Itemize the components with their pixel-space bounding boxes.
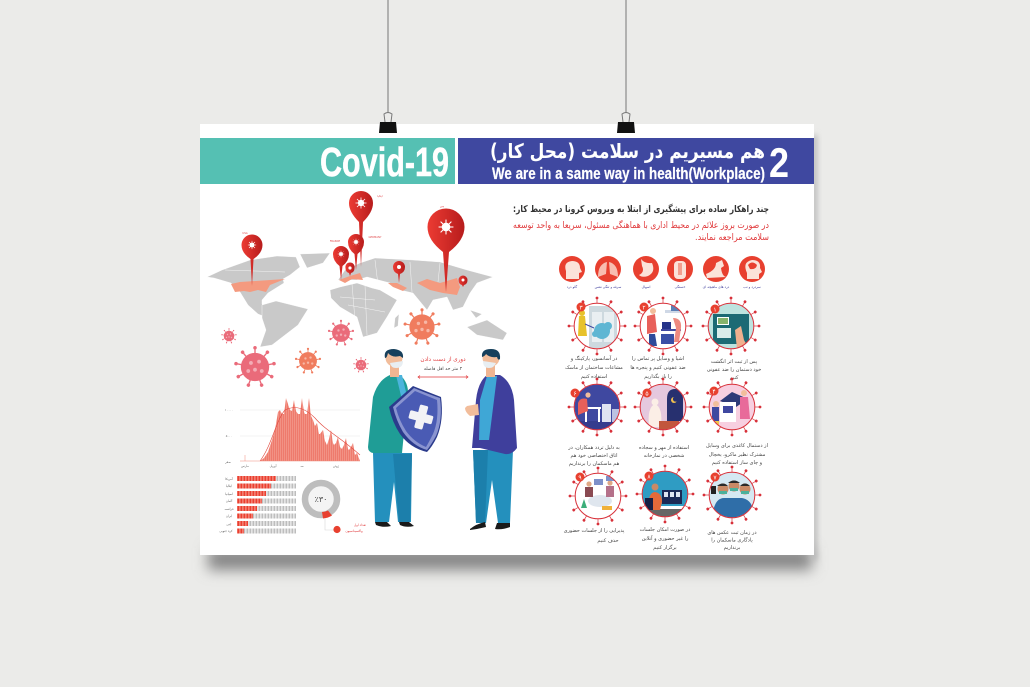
chart bars — [260, 398, 360, 461]
callout: social distance: دوری از دست دادن — [420, 357, 466, 363]
heading: Covid-19: Covid-19 — [320, 139, 449, 185]
badge 8: ۸ — [647, 474, 651, 480]
pin country labels: ایتالیا — [377, 195, 383, 198]
caption 4: از دستمال کاغذی برای وسایل — [706, 443, 768, 449]
header: title band — [458, 138, 814, 186]
step 2: workspace — [630, 297, 692, 380]
icon: headache and fever: سردرد و تب — [743, 285, 761, 289]
caption 8: در صورت امکان جلسات — [640, 527, 690, 533]
step 8: online meeting — [636, 465, 694, 551]
icon: fatigue — [667, 256, 693, 289]
caption 5: شخصی در نمازخانه — [644, 453, 684, 459]
caption 6: اتاق اختصاصی خود هم — [570, 453, 618, 459]
caption 9 — [564, 528, 625, 544]
chart axis labels: صفر — [224, 460, 231, 464]
highlighted: Iran — [388, 283, 407, 291]
pin: Switzerland — [345, 262, 355, 276]
step 3: elevator disinfection — [565, 297, 626, 380]
step 5: prayer — [634, 378, 692, 459]
icon: virus pink — [328, 320, 354, 346]
icon: muscle pain — [703, 256, 730, 289]
icon: headache and fever — [739, 256, 765, 289]
badge 5: ۵ — [645, 390, 649, 398]
caption 2 — [630, 356, 686, 380]
ranking bars: ایتالیا — [226, 484, 232, 488]
chart trend curve — [260, 408, 360, 461]
icon: virus orange — [295, 348, 321, 374]
ranking bars: فرانسه — [224, 507, 234, 511]
text: intro line: چند راهکار ساده برای پیشگیری از ابتلا به ویروس کرونا در محیط کار: — [513, 203, 769, 215]
pin: USA — [242, 234, 262, 286]
caption 6 — [567, 445, 620, 467]
badge 9: ۹ — [578, 474, 582, 482]
chart axis labels: آوریل — [270, 464, 277, 468]
chart axis labels: مارس — [241, 464, 249, 468]
hanging strings — [388, 0, 626, 113]
caption 9: پذیرایی را از جلسات حضوری — [564, 528, 625, 534]
caption 1: پس از ثبت اثر انگشت — [711, 358, 758, 365]
text: red notice: در صورت بروز علائم در محیط اداری با هماهنگی مسئول، سریعا به واحد توسعه — [513, 219, 769, 231]
poster shadow — [208, 135, 817, 570]
icon: virus orange large — [403, 308, 441, 345]
pin: China — [428, 208, 464, 292]
caption 1 — [707, 358, 761, 381]
area chart: daily cases — [224, 398, 360, 468]
highlighted: China — [417, 278, 460, 295]
icon: sore throat: گلو درد — [567, 284, 577, 289]
chart axis labels: ۵۰۰۰ — [226, 434, 232, 438]
heading: English title: We are in a same way in health(Workplace) — [492, 165, 765, 183]
caption 8: برگزار کنیم — [653, 544, 677, 551]
icon: muscle pain: درد های ماهیچه ای — [703, 285, 730, 289]
text: red notice — [513, 219, 769, 243]
caption 5: استفاده از مهر و سجاده — [639, 445, 689, 451]
callout: social distance — [418, 357, 468, 378]
world map — [207, 253, 507, 347]
ranking bars: اسپانیا — [225, 492, 233, 496]
pin country labels: GERMANY — [368, 235, 382, 239]
caption 3 — [565, 355, 623, 380]
caption 3: مشاعات ساختمان از ماسک — [565, 365, 623, 371]
pin country labels: USA — [242, 231, 248, 235]
character: man with shield — [368, 349, 442, 527]
binder clip left — [379, 112, 397, 133]
ranking bars: آمریکا — [225, 477, 233, 481]
badge 7: ۷ — [713, 474, 717, 482]
callout: social distance: ۲ متر حد اقل فاصله — [424, 366, 463, 372]
ranking bars: کره جنوبی — [219, 529, 233, 533]
icon: sore throat — [559, 256, 585, 289]
caption 6: به دلیل تردد همکاران، در — [567, 445, 620, 451]
caption 6: هم ماسکمان را برنداریم — [569, 461, 620, 467]
pin: Germany — [348, 234, 364, 270]
caption 7 — [707, 530, 757, 551]
ranking bars: ایران — [226, 514, 232, 518]
donut chart: واکسیناسیون — [345, 529, 363, 533]
donut chart: تعداد اول — [354, 523, 366, 527]
pin: Korea — [458, 276, 468, 287]
icon: virus small — [353, 357, 369, 373]
map pins — [242, 191, 468, 292]
pin: Italy tall — [349, 191, 373, 267]
caption 1: کنیم — [730, 375, 739, 381]
heading: Persian title: هم مسیریم در سلامت (محل کار) — [490, 139, 765, 163]
ranking bars: چین — [226, 522, 232, 526]
caption 2: ضد عفونی کنیم و پنجره ها — [630, 365, 686, 371]
heading: big number 2: 2 — [769, 139, 789, 186]
pin: Iran — [393, 261, 405, 283]
step 7: group selfie — [703, 466, 761, 551]
caption 4 — [706, 443, 768, 466]
chart axis labels — [224, 408, 340, 468]
chart axis labels: ژوئن — [333, 464, 340, 468]
caption 8 — [640, 527, 690, 551]
step 1: fingerprint — [702, 297, 761, 381]
icon: virus large — [234, 346, 276, 387]
caption 2: اشیا و وسایل پر تماس را — [632, 356, 684, 362]
badge 1: ۱ — [713, 306, 717, 314]
highlighted: Europe — [339, 273, 363, 283]
ranking bars — [219, 476, 296, 534]
badge 3: ۳ — [579, 304, 583, 312]
text: red notice: سلامت مراجعه نمایند. — [695, 233, 769, 243]
badge 4: ۴ — [712, 388, 716, 396]
caption 7: در زمان ثبت عکس های — [707, 530, 757, 536]
caption 8: را غیر حضوری و آنلاین — [642, 535, 689, 542]
badge 2: ۲ — [642, 304, 646, 312]
caption 2: را باز بگذاریم — [644, 373, 672, 380]
chart axis labels: مه — [300, 464, 304, 468]
caption 9: حذف کنیم — [597, 538, 619, 544]
poster sheet — [200, 124, 814, 555]
chart axis labels: ۱۰۰۰۰ — [225, 408, 233, 412]
icon: stomach — [633, 256, 659, 289]
donut chart — [305, 483, 366, 533]
arrow: distance — [418, 376, 468, 378]
header: Covid-19 band — [200, 138, 455, 185]
ranking bars: آلمان — [226, 499, 232, 503]
icon: lungs — [595, 256, 621, 289]
pin country labels: FRANCE — [330, 239, 341, 243]
caption 5 — [639, 445, 689, 459]
icon: stomach: اسهال — [642, 285, 650, 289]
pin country labels: چین — [440, 205, 445, 208]
icon: shield — [389, 386, 442, 452]
icon: virus small left — [221, 328, 237, 344]
viruses — [221, 308, 441, 387]
pin: France — [333, 246, 349, 280]
highlighted: USA — [231, 279, 285, 292]
caption 7: برنداریم — [724, 545, 740, 551]
binder clip right — [617, 112, 635, 133]
caption 3: استفاده کنیم — [581, 374, 607, 380]
caption 7: یادگاری ماسکمان را — [711, 536, 753, 544]
caption 4: مشترک نظیر ماکرو، یخچال — [709, 451, 766, 458]
step 9: meeting table — [564, 467, 627, 544]
symptom icons row — [559, 256, 765, 289]
step 4: shared appliances — [703, 378, 768, 466]
caption 1: خود دستمان را ضد عفونی — [707, 367, 761, 373]
badge 6: ۶ — [573, 390, 577, 398]
donut chart: ٪۳۰ — [315, 495, 327, 504]
caption 4: و چای ساز استفاده کنیم — [712, 460, 763, 466]
pin country labels — [242, 195, 445, 243]
icon: lungs: سرفه و تنگی نفس — [595, 284, 621, 289]
step 6: office — [567, 378, 626, 467]
character: man in blue jacket — [465, 349, 517, 530]
icon: fatigue: خستگی — [675, 284, 685, 289]
caption 3: در آسانسور، پارکینگ و — [570, 355, 617, 362]
